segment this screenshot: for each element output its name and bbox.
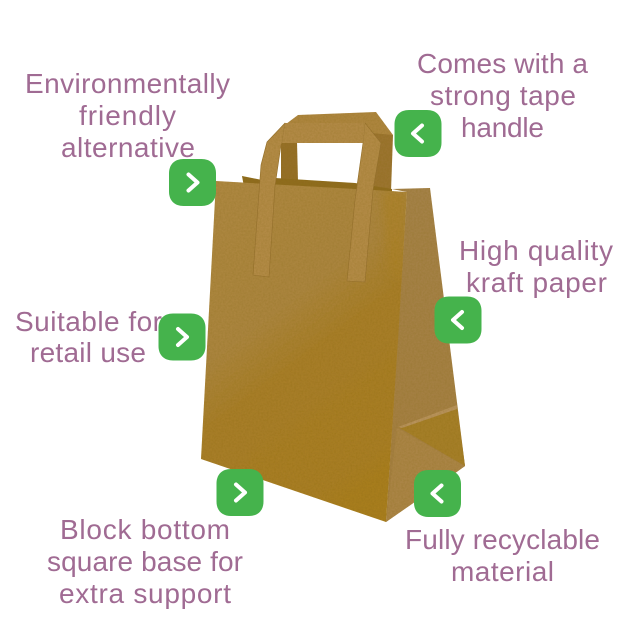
callout: retail use	[15, 306, 162, 368]
icon: right arrow button bottom left	[216, 469, 264, 516]
callout: retail use: Suitable for	[15, 306, 162, 337]
gusset bottom flap	[386, 428, 465, 522]
right strap	[347, 123, 381, 282]
callout: block bottom: Block bottom	[60, 514, 230, 545]
bag front panel	[201, 181, 407, 522]
callout: environmentally friendly alternative: alternative	[61, 132, 195, 163]
icon: right arrow button middle left	[158, 314, 206, 360]
callout: strong tape handle: handle	[461, 112, 544, 143]
gusset crease	[398, 405, 457, 428]
back handle right strap	[370, 133, 393, 191]
back handle left strap	[281, 142, 298, 182]
icon: left arrow button middle right	[434, 296, 482, 344]
callout: environmentally friendly alternative: friendly	[79, 100, 176, 131]
gusset lower fold	[398, 406, 465, 466]
left strap	[253, 123, 285, 277]
callout: fully recyclable: material	[451, 556, 554, 587]
icon: right arrow button top left	[169, 159, 216, 206]
callout: retail use: retail use	[30, 337, 146, 368]
callout: strong tape handle	[417, 48, 588, 143]
top strap	[282, 123, 365, 143]
callout: block bottom: square base for	[47, 546, 243, 577]
callout: strong tape handle: strong tape	[430, 80, 576, 111]
callout: high quality kraft paper: kraft paper	[466, 267, 607, 298]
icon: left arrow button top right	[394, 110, 442, 157]
callout: high quality kraft paper	[459, 235, 613, 298]
callout: block bottom: extra support	[59, 578, 231, 609]
callout: high quality kraft paper: High quality	[459, 235, 613, 266]
back handle top band	[286, 112, 393, 135]
callout: fully recyclable: Fully recyclable	[405, 524, 600, 555]
callout: block bottom	[47, 514, 243, 609]
callout: strong tape handle: Comes with a	[417, 48, 588, 79]
front handle	[253, 123, 381, 282]
icon: left arrow button bottom right	[414, 470, 461, 517]
callout: fully recyclable	[405, 524, 600, 587]
back inner rim	[242, 176, 392, 196]
bag side gusset	[386, 188, 465, 522]
callout: environmentally friendly alternative	[25, 68, 230, 163]
front right shading	[382, 191, 407, 280]
kraft paper bag	[201, 112, 465, 522]
callout: environmentally friendly alternative: Environmentally	[25, 68, 230, 99]
